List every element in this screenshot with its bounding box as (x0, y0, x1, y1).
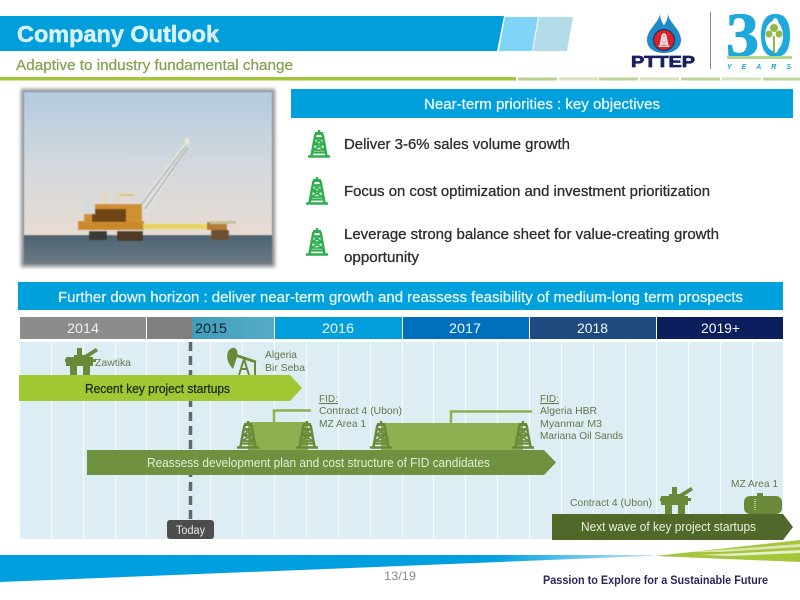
label: FID group 1: MZ Area 1 (319, 418, 366, 430)
icon: pumpjack (227, 348, 256, 375)
arrow: recent key project startups (19, 375, 302, 401)
objective 1: Deliver 3-6% sales volume growth (344, 137, 570, 153)
timeline year bar: 2016 (322, 320, 354, 336)
objective 3 (306, 227, 719, 266)
objective 2: Focus on cost optimization and investment prioritization (344, 184, 710, 200)
label: FID group 2: Myanmar M3 (540, 418, 602, 430)
label: FID group 2 (540, 393, 623, 442)
panel: near-term priorities heading: Near-term priorities : key objectives (424, 97, 660, 113)
objective 1 (308, 130, 570, 156)
header bar (0, 16, 573, 51)
title: Company Outlook (17, 21, 220, 47)
arrow: next wave of key project startups (552, 514, 793, 540)
timeline year bar: 2018 (577, 320, 608, 336)
today marker: Today (176, 525, 205, 537)
icon: rig next wave (660, 487, 693, 514)
timeline year bar: 2019+ (701, 320, 740, 336)
label: FID group 2: Algeria HBR (540, 405, 597, 417)
photo: offshore platform (21, 89, 275, 267)
label: Contract 4 (Ubon): Contract 4 (Ubon) (570, 497, 652, 509)
timeline year bar: 2014 (67, 320, 99, 336)
timeline year bar: 2017 (449, 320, 481, 336)
logo: PTTEP: PTTEP (631, 54, 695, 71)
subtitle: Adaptive to industry fundamental change (16, 57, 293, 74)
label: FID group 1: Contract 4 (Ubon) (319, 405, 402, 417)
arrow: reassess development plan: Reassess development plan and cost structure of FID candidates (147, 456, 490, 470)
label: FID group 1: FID: (319, 393, 338, 405)
arrow: reassess development plan (87, 450, 556, 475)
timeline chart background (20, 342, 783, 539)
panel: further down horizon heading: Further down horizon : deliver near-term growth and reassess feasibility of medium-long term prospects (58, 290, 743, 306)
label: Algeria Bir Seba: Bir Seba (265, 362, 305, 374)
label: FID group 2: Mariana Oil Sands (540, 430, 623, 442)
label: MZ Area 1: MZ Area 1 (731, 478, 778, 490)
arrow: recent key project startups: Recent key project startups (85, 382, 230, 396)
timeline year bar (20, 317, 783, 339)
objective 3: opportunity (344, 250, 420, 266)
label: Zawtika: Zawtika (95, 357, 131, 369)
page number: 13/19 (384, 569, 416, 583)
panel: near-term priorities heading (291, 89, 793, 118)
header rule (0, 77, 800, 80)
logo: 30 years: 30 (726, 2, 792, 70)
objective 2 (306, 177, 710, 204)
footer wave (0, 540, 800, 582)
FID group 1 (237, 410, 318, 450)
timeline year bar: 2015 (195, 320, 227, 336)
icon: tank (744, 493, 782, 514)
icon: Zawtika rig (65, 348, 98, 375)
logo: 30 years: YEARS (727, 64, 791, 71)
label: Algeria Bir Seba: Algeria (265, 349, 297, 361)
label: FID group 1 (319, 393, 402, 430)
label: Algeria Bir Seba (265, 349, 305, 374)
FID group 2 (370, 412, 534, 450)
arrow: next wave of key project startups: Next wave of key project startups (581, 520, 756, 534)
logo: PTTEP (631, 12, 711, 71)
objective 3: Leverage strong balance sheet for value-creating growth (344, 227, 719, 243)
tagline: Passion to Explore for a Sustainable Future (543, 575, 768, 587)
label: FID group 2: FID: (540, 393, 559, 405)
today marker (167, 342, 214, 539)
panel: further down horizon heading (18, 282, 783, 310)
